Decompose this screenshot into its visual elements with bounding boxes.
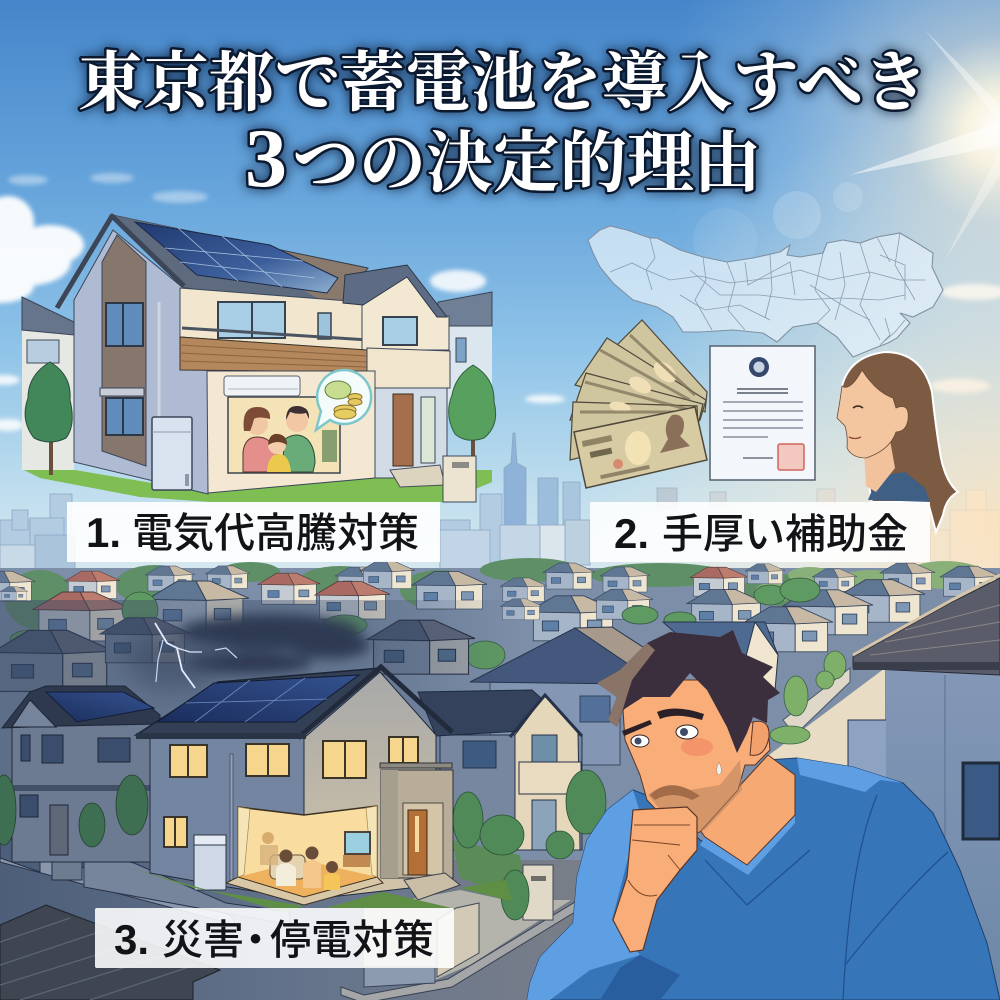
neighbourhood base bbox=[0, 558, 1000, 1000]
post bbox=[443, 456, 476, 502]
eyebrows bbox=[622, 720, 652, 736]
solar panels house 1 bbox=[135, 222, 338, 293]
label 3: 3. bbox=[114, 916, 149, 963]
lawn bbox=[24, 470, 492, 502]
block wall bbox=[84, 852, 290, 925]
left wall bbox=[74, 230, 208, 494]
label 2 bbox=[590, 502, 930, 562]
house 1: summer house with solar roof and battery bbox=[22, 215, 496, 502]
ear bbox=[750, 721, 769, 755]
label 2: 2. bbox=[614, 510, 649, 557]
hair bbox=[597, 630, 780, 753]
back row of houses bbox=[0, 561, 1000, 601]
lower front wall bbox=[207, 371, 375, 493]
right background house, bottom area bbox=[418, 690, 606, 920]
face bbox=[623, 680, 770, 835]
bushes between houses bbox=[10, 578, 820, 669]
dusk tint bbox=[0, 600, 520, 1000]
jacket bbox=[868, 472, 930, 502]
solar panels house 3 bbox=[157, 675, 359, 722]
storage battery house 1 bbox=[152, 417, 192, 490]
smiling woman bbox=[837, 352, 958, 532]
label 1: 1. bbox=[86, 509, 121, 556]
entrance block bbox=[380, 763, 460, 900]
roof bbox=[112, 215, 368, 302]
left background house, bottom area bbox=[0, 686, 160, 862]
hand bbox=[613, 807, 697, 952]
road and foreground bbox=[0, 833, 600, 1000]
warm haze over lower right sky bbox=[560, 95, 1000, 580]
hair bbox=[842, 352, 958, 532]
title line 2: つの決定的理由 bbox=[292, 127, 761, 201]
air conditioner bbox=[224, 376, 300, 396]
sweat drop bbox=[716, 762, 722, 775]
neck bbox=[864, 440, 895, 492]
left windows bbox=[106, 303, 143, 435]
yen banknotes bbox=[570, 320, 707, 488]
slope and bushes bbox=[765, 668, 885, 795]
fence bbox=[0, 833, 82, 880]
gable right bbox=[362, 276, 449, 350]
title bbox=[78, 48, 928, 205]
foreground right house bbox=[848, 575, 1000, 1000]
skyline bbox=[0, 433, 1000, 580]
storm cloud and lightning bbox=[125, 614, 370, 690]
front row of houses bbox=[0, 599, 833, 691]
speech bubble with coins bbox=[316, 370, 371, 430]
subsidy document bbox=[710, 346, 815, 480]
tree left bbox=[25, 362, 72, 475]
label 3: 停電対策 bbox=[270, 917, 434, 963]
tree right bbox=[449, 365, 496, 470]
lit room bbox=[226, 806, 383, 905]
clouds bbox=[0, 173, 1000, 431]
eyes bbox=[631, 725, 698, 747]
foreground roof bottom left bbox=[0, 905, 220, 1000]
neck bbox=[700, 755, 795, 865]
neighbour house right bbox=[436, 292, 492, 415]
label 2: 手厚い補助金 bbox=[662, 511, 908, 557]
label 1: 電気代高騰対策 bbox=[132, 510, 419, 556]
house 3: blackout house with battery bbox=[130, 667, 512, 912]
sweater bbox=[527, 758, 1000, 1000]
label 3: ・ bbox=[235, 917, 276, 963]
label 1 bbox=[67, 502, 440, 562]
worried man in blue sweater bbox=[527, 630, 1000, 1000]
neighbour house left bbox=[22, 297, 74, 470]
driveway bbox=[364, 890, 571, 980]
family window bbox=[228, 397, 340, 473]
middle row of houses bbox=[0, 572, 925, 641]
big roof behind the man bbox=[470, 622, 778, 765]
label 3: 災害 bbox=[162, 917, 244, 963]
wooden balcony band bbox=[180, 337, 367, 372]
title line 2: 3 bbox=[245, 112, 287, 205]
lawn of house 3 bbox=[130, 868, 512, 912]
stubble bbox=[648, 760, 742, 836]
gate post bbox=[523, 865, 553, 920]
map of Tokyo bbox=[588, 226, 943, 357]
lit windows house 3 bbox=[164, 737, 418, 847]
label 3 bbox=[95, 908, 454, 968]
moustache bbox=[650, 785, 700, 800]
face bbox=[837, 370, 908, 458]
upper front wall bbox=[180, 288, 362, 350]
title line 1: 東京都で蓄電池を導入すべき bbox=[78, 48, 928, 120]
battery house 3 bbox=[194, 835, 226, 890]
